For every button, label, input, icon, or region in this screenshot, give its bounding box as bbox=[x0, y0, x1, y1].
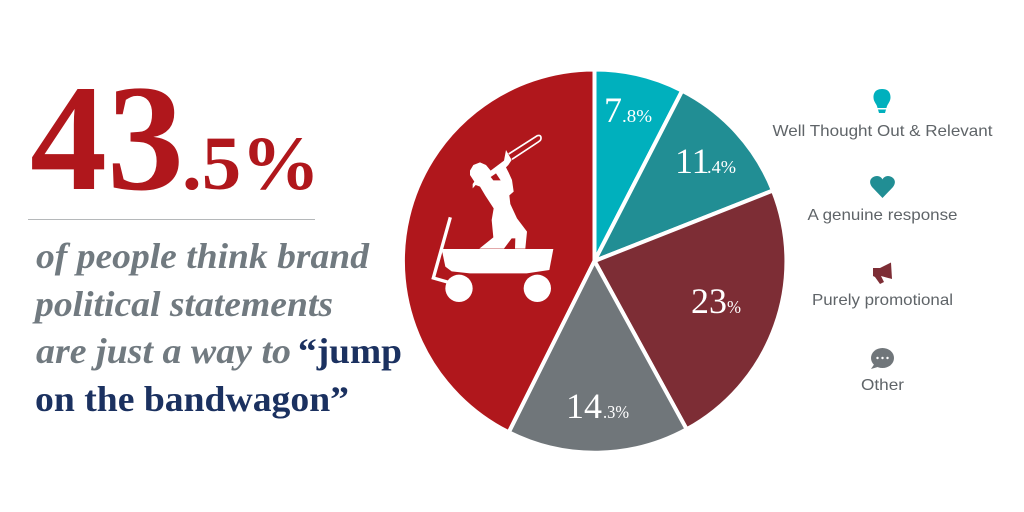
legend item: well thought out: Well Thought Out & Relevant bbox=[772, 123, 993, 140]
pie value labels bbox=[566, 90, 741, 426]
value 11.4% bbox=[675, 141, 736, 181]
legend item: genuine response bbox=[808, 176, 958, 224]
slice: purely promotional 23% bbox=[594, 190, 786, 429]
legend item: other bbox=[861, 348, 905, 394]
pie chart bbox=[403, 69, 786, 453]
icon: musician on wagon bbox=[433, 135, 553, 302]
value 23%: 23 bbox=[691, 281, 727, 321]
value 11.4%: 11 bbox=[675, 141, 710, 181]
value 14.3% bbox=[566, 386, 629, 426]
slice: other 14.3% bbox=[509, 261, 687, 453]
value 23%: % bbox=[727, 297, 741, 317]
statement text bbox=[32, 236, 402, 419]
headline statistic: .5% bbox=[182, 122, 320, 206]
musician figure bbox=[470, 135, 541, 249]
statement text: “jump bbox=[298, 331, 402, 371]
value 14.3%: 14 bbox=[566, 386, 602, 426]
legend item: genuine response: A genuine response bbox=[808, 207, 958, 224]
statement text: are just a way to bbox=[36, 331, 291, 371]
headline statistic: 43 bbox=[30, 54, 184, 222]
legend item: other: Other bbox=[861, 377, 905, 394]
statement text: on the bandwagon” bbox=[35, 379, 349, 419]
statement text: of people think brand bbox=[36, 236, 370, 276]
headline statistic bbox=[30, 54, 320, 222]
value 14.3%: .3% bbox=[603, 402, 629, 422]
value 7.8%: 7 bbox=[604, 90, 622, 130]
wagon bbox=[433, 217, 553, 302]
legend item: purely promotional: Purely promotional bbox=[812, 292, 953, 309]
slice: well thought out 7.8% bbox=[594, 69, 682, 261]
value 7.8% bbox=[604, 90, 652, 130]
divider bbox=[28, 219, 315, 220]
value 11.4%: .4% bbox=[707, 157, 736, 177]
legend item: well thought out bbox=[772, 89, 993, 140]
legend bbox=[772, 89, 993, 394]
slice: genuine response 11.4% bbox=[594, 91, 773, 261]
legend item: purely promotional bbox=[812, 262, 953, 309]
statement text: political statements bbox=[32, 284, 333, 324]
value 7.8%: .8% bbox=[622, 106, 652, 126]
slice: bandwagon 43.5% bbox=[403, 69, 594, 432]
